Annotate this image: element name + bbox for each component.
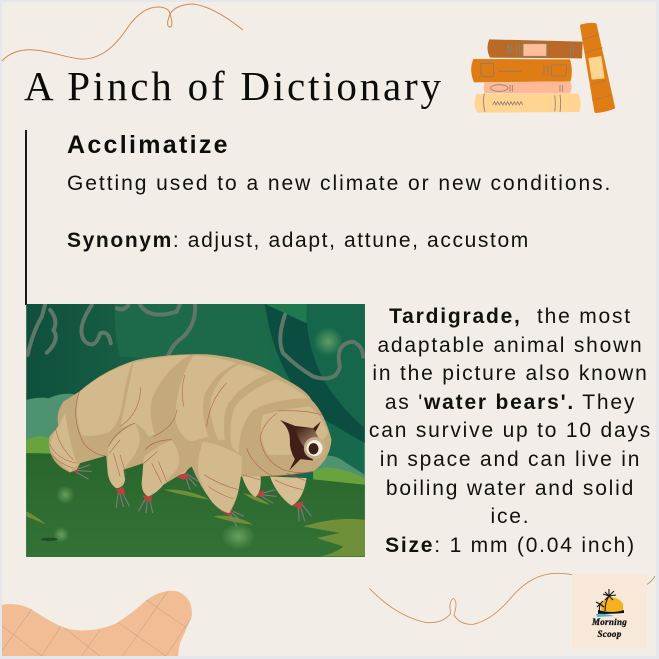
background leaves	[115, 304, 365, 443]
side text: tardigrade description	[369, 305, 652, 557]
illustration: tardigrade in forest	[26, 304, 365, 557]
side text: tardigrade description: in the picture also known	[372, 362, 649, 385]
definition text: Getting used to a new climate or new conditions.	[67, 172, 612, 195]
red outlines	[50, 375, 322, 499]
icon: palm and sun	[596, 589, 624, 617]
logo text	[592, 617, 627, 640]
side text: tardigrade description: boiling water and solid	[386, 477, 635, 500]
icon: stack of books	[471, 22, 615, 113]
bottom right swirl	[369, 572, 656, 625]
logo text: Scoop	[598, 629, 622, 639]
logo text: Morning	[592, 617, 627, 627]
side text: tardigrade description: in space and can live in	[380, 448, 641, 471]
ground	[26, 394, 77, 440]
heading: Acclimatize: Acclimatize	[67, 131, 230, 159]
vertical rule	[25, 130, 27, 305]
side text: tardigrade description: ice.	[491, 505, 530, 528]
mouth tube	[280, 420, 321, 470]
side text: tardigrade description: Tardigrade, the most	[389, 305, 632, 328]
side text: tardigrade description: adaptable animal shown	[377, 334, 644, 357]
synonyms text: Synonym: adjust, adapt, attune, accustom	[67, 229, 530, 252]
side text: tardigrade description: can survive up to 10 days	[369, 419, 652, 442]
side text: tardigrade description: Size: 1 mm (0.04 inch)	[385, 534, 636, 557]
vines	[28, 304, 363, 378]
light body segments	[50, 355, 328, 513]
logo: Morning Scoop	[572, 574, 647, 648]
body	[49, 354, 331, 513]
back legs behind body	[167, 463, 307, 506]
title: A Pinch of Dictionary	[24, 63, 444, 109]
claws	[75, 465, 312, 526]
red feet	[71, 466, 303, 516]
decorative blob bottom left	[2, 590, 192, 656]
side text: tardigrade description: as 'water bears'. They	[385, 391, 636, 414]
